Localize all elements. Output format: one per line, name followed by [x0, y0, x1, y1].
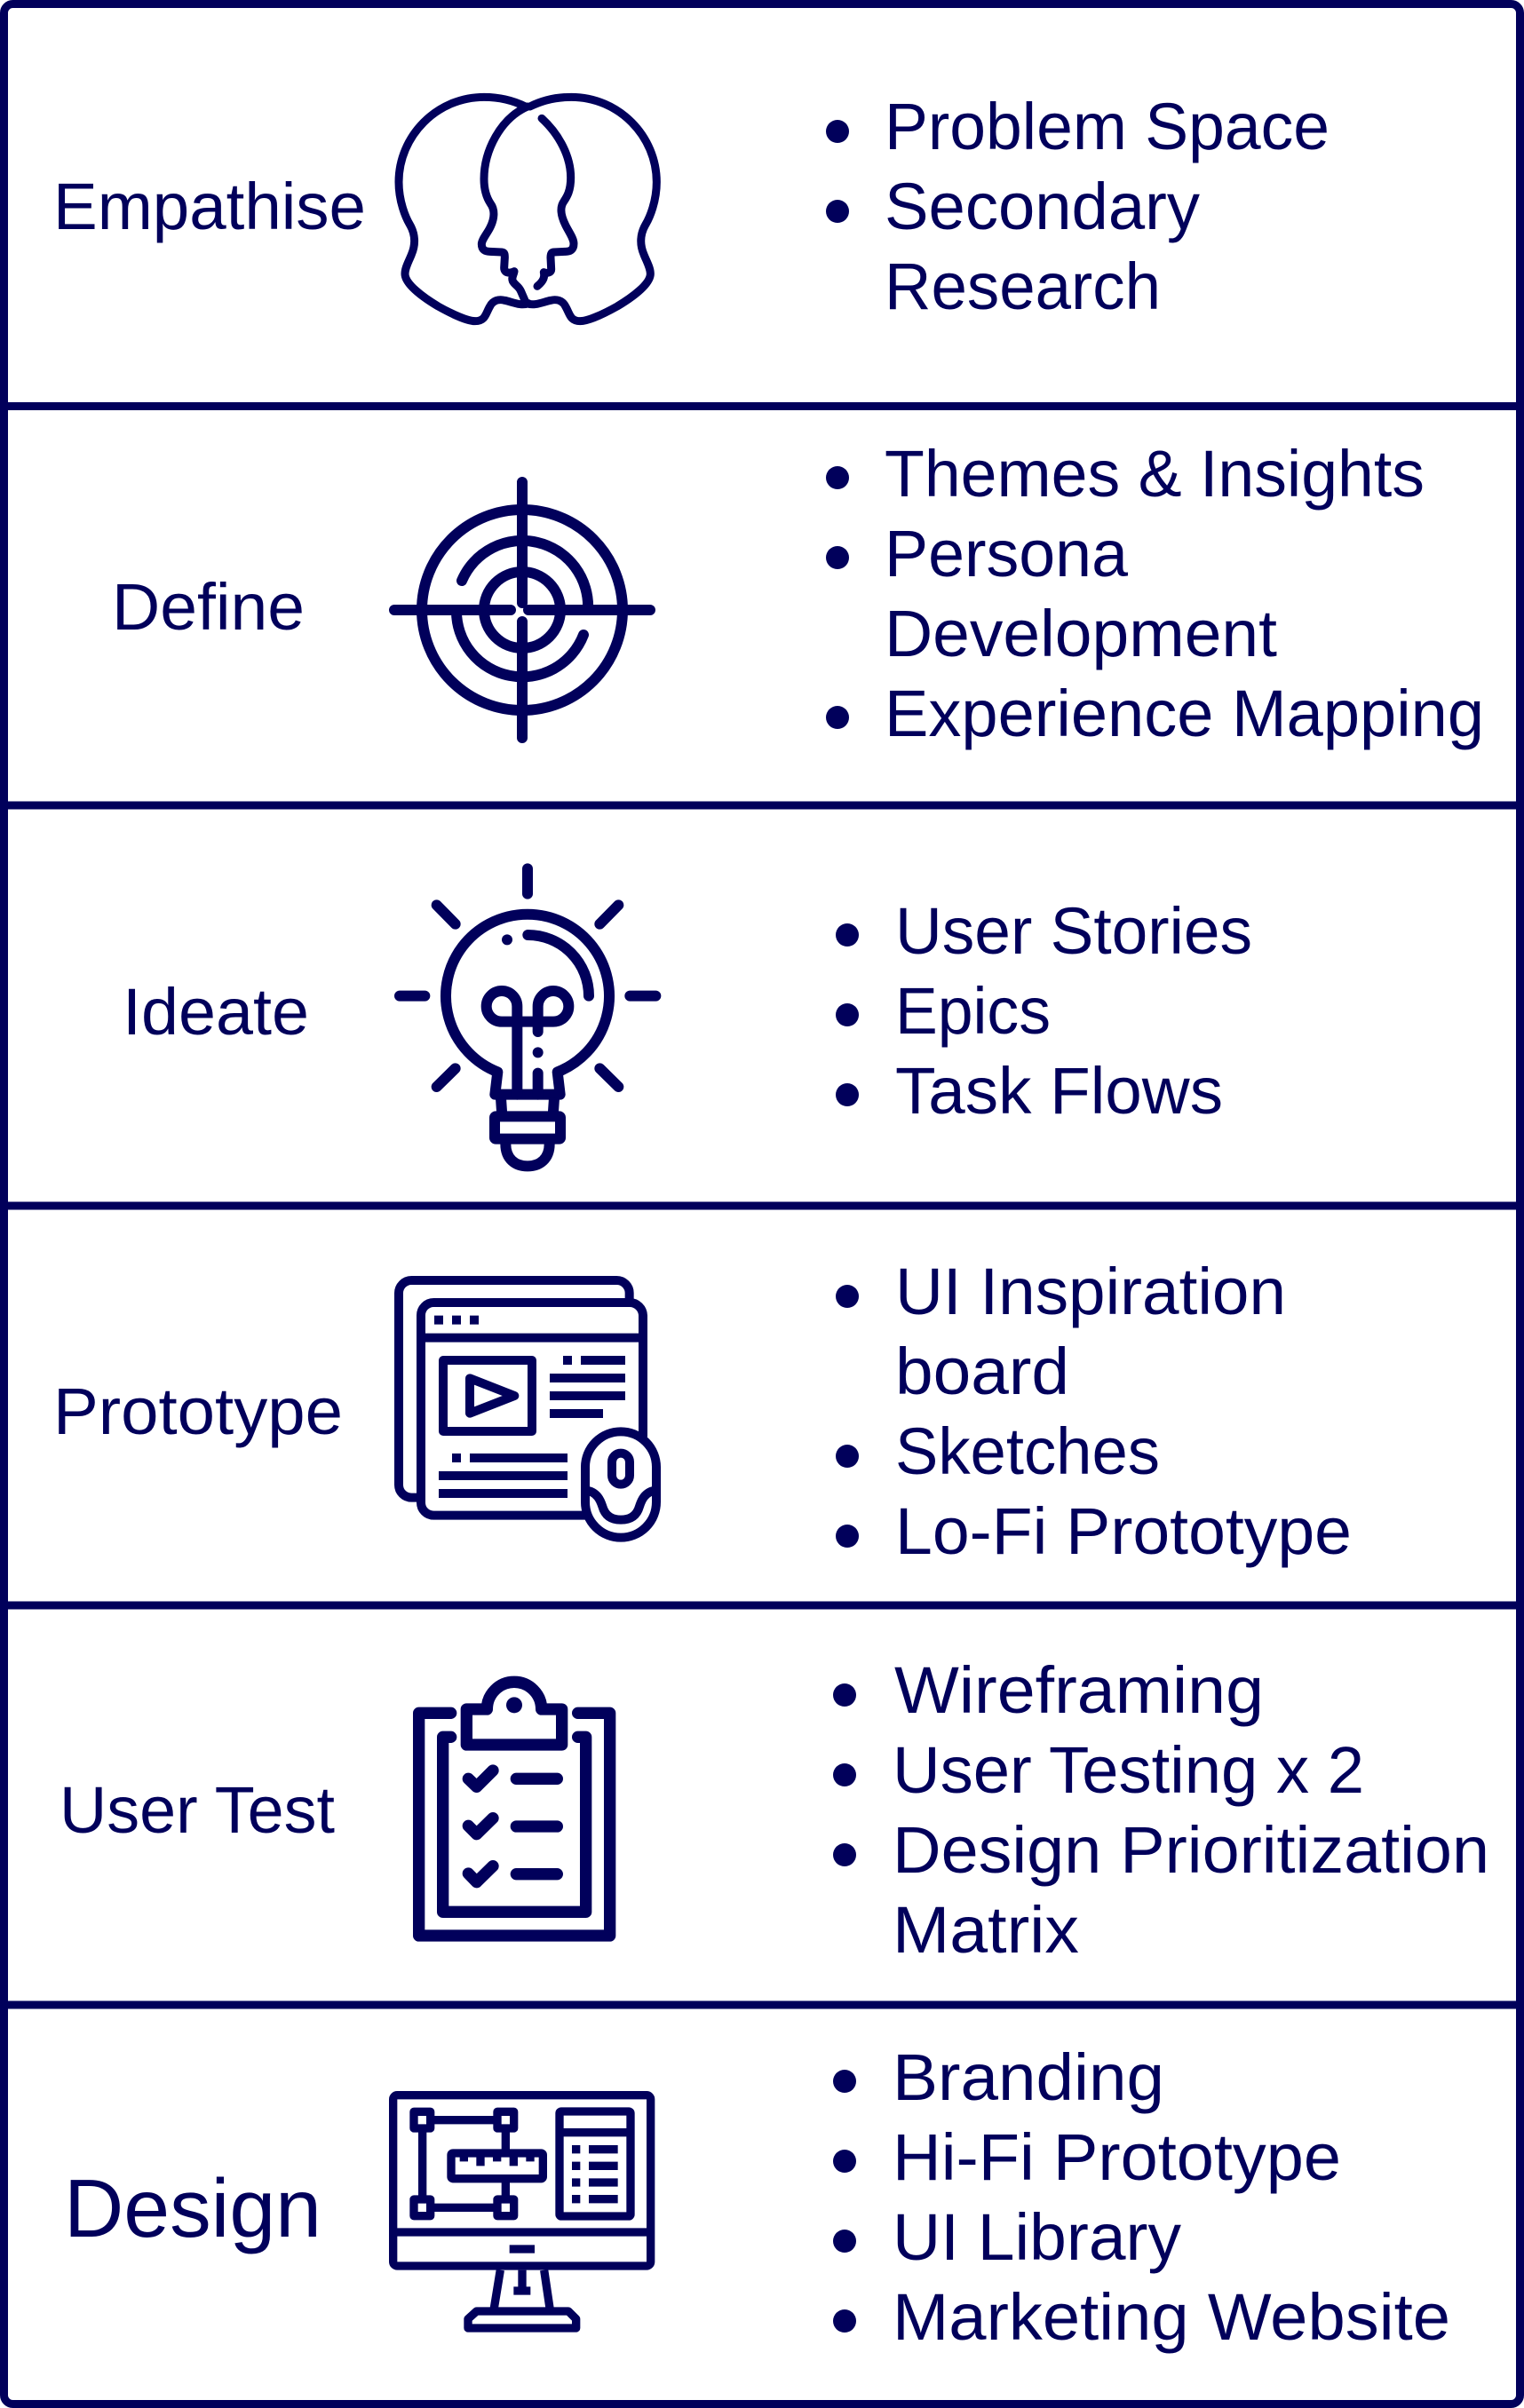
bullet list: Prototype activities: Lo-Fi Prototype [895, 1494, 1352, 1568]
icon: two facing heads [399, 97, 656, 321]
bullet list: Ideate activities: Task Flows [895, 1054, 1223, 1128]
icon: clipboard checklist [419, 1682, 610, 1936]
bullet list: Prototype activities [836, 1255, 1352, 1568]
bullet list: Define activities: Development [885, 597, 1277, 670]
bullet list: Define activities: Persona [885, 517, 1129, 590]
bullet list: Empathise activities [826, 90, 1330, 323]
bullet list: Ideate activities: Epics [895, 974, 1051, 1048]
bullet list: Ideate activities [836, 894, 1252, 1128]
bullet list: Design activities: UI Library [893, 2200, 1181, 2274]
bullet list: Design activities: Marketing Website [893, 2280, 1450, 2354]
icon: desktop monitor with wireframe [393, 2095, 651, 2328]
bullet list: Define activities: Themes & Insights [885, 437, 1425, 511]
bullet list: User Test activities: Design Prioritization [893, 1813, 1489, 1887]
icon: light bulb [400, 868, 655, 1166]
bullet list: Prototype activities: Sketches [895, 1414, 1160, 1488]
label: User Test: User Test [60, 1773, 335, 1847]
label: Prototype: Prototype [53, 1374, 343, 1448]
bullet list: Design activities: Branding [893, 2040, 1164, 2114]
bullet list: User Test activities: Wireframing [894, 1653, 1264, 1727]
bullet list: Design activities [833, 2040, 1450, 2354]
bullet list: User Test activities [833, 1653, 1489, 1967]
bullet list: Prototype activities: UI Inspiration [895, 1255, 1286, 1328]
bullet list: Ideate activities: User Stories [895, 894, 1252, 968]
label: Ideate: Ideate [123, 975, 309, 1049]
panel: Define [8, 410, 1516, 801]
bullet list: Empathise activities: Problem Space [885, 90, 1330, 163]
bullet list: Prototype activities: board [895, 1335, 1069, 1408]
panel: Ideate [8, 809, 1516, 1201]
label: Design: Design [64, 2162, 321, 2254]
icon: target crosshair [394, 482, 650, 738]
panel: Empathise [8, 8, 1516, 402]
label: Define: Define [112, 570, 305, 644]
bullet list: Design activities: Hi-Fi Prototype [893, 2120, 1341, 2194]
bullet list: User Test activities: Matrix [893, 1893, 1079, 1967]
bullet list: Define activities: Experience Mapping [885, 677, 1484, 750]
bullet list: User Test activities: User Testing x 2 [893, 1733, 1364, 1807]
panel: Design [8, 2008, 1516, 2400]
bullet list: Empathise activities: Secondary [885, 170, 1200, 243]
bullet list: Empathise activities: Research [885, 250, 1161, 323]
panel: User Test [8, 1609, 1516, 2001]
bullet list: Define activities [826, 437, 1484, 750]
icon: browser window with mouse [399, 1280, 656, 1538]
label: Empathise: Empathise [53, 170, 366, 243]
panel: Prototype [8, 1209, 1516, 1602]
